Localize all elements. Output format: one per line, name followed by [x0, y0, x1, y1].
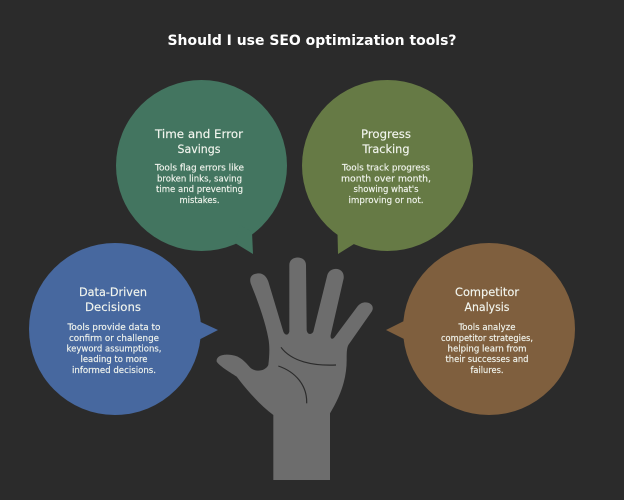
- heading: time and error savings: Time and Error: [154, 127, 243, 141]
- text: progress tracking body: month over month,: [341, 174, 431, 184]
- title: Should I use SEO optimization tools?: [168, 33, 456, 49]
- text: data-driven decisions body: confirm or challenge: [69, 334, 159, 344]
- speech bubble: olive: [302, 80, 473, 254]
- text: progress tracking body: Tools track progress: [341, 164, 430, 174]
- heading: time and error savings: Savings: [178, 142, 220, 156]
- text: time and error savings body: mistakes.: [180, 196, 220, 206]
- text: data-driven decisions body: [66, 323, 162, 376]
- text: data-driven decisions body: keyword assumptions,: [66, 344, 162, 354]
- text: time and error savings body: Tools flag errors like: [154, 164, 244, 174]
- palm crease: upper: [281, 347, 336, 365]
- heading: progress tracking: [361, 127, 411, 156]
- text: time and error savings body: [154, 164, 244, 206]
- text: competitor analysis body: failures.: [470, 366, 504, 376]
- heading: data-driven decisions: Decisions: [85, 300, 141, 314]
- panel: data-driven decisions: [29, 243, 218, 415]
- heading: competitor analysis: Competitor: [455, 285, 519, 299]
- text: time and error savings body: time and preventing: [156, 185, 243, 195]
- panel: competitor analysis: [386, 243, 575, 415]
- speech bubble: green: [116, 80, 287, 254]
- heading: progress tracking: Tracking: [362, 142, 410, 156]
- heading: competitor analysis: Analysis: [464, 300, 510, 314]
- speech bubble: blue: [29, 243, 218, 415]
- text: progress tracking body: showing what's: [354, 185, 419, 195]
- text: progress tracking body: [341, 164, 431, 206]
- text: progress tracking body: improving or not.: [348, 196, 424, 206]
- icon: open hand: [217, 257, 373, 480]
- heading: competitor analysis: [455, 285, 519, 314]
- text: competitor analysis body: their successes and: [446, 355, 528, 365]
- text: competitor analysis body: Tools analyze: [458, 323, 516, 333]
- text: competitor analysis body: [441, 323, 533, 376]
- heading: data-driven decisions: [79, 285, 147, 314]
- heading: data-driven decisions: Data-Driven: [79, 285, 147, 299]
- speech bubble: brown: [386, 243, 575, 415]
- heading: time and error savings: [154, 127, 243, 156]
- heading: progress tracking: Progress: [361, 127, 411, 141]
- text: data-driven decisions body: leading to more: [80, 355, 148, 365]
- palm crease: lower: [278, 366, 307, 403]
- panel: time and error savings: [116, 80, 287, 254]
- text: time and error savings body: broken links, saving: [157, 174, 242, 184]
- panel: progress tracking: [302, 80, 473, 254]
- text: competitor analysis body: helping learn from: [448, 344, 526, 354]
- text: data-driven decisions body: Tools provide data to: [67, 323, 161, 333]
- text: competitor analysis body: competitor strategies,: [441, 334, 533, 344]
- text: data-driven decisions body: informed decisions.: [72, 366, 156, 376]
